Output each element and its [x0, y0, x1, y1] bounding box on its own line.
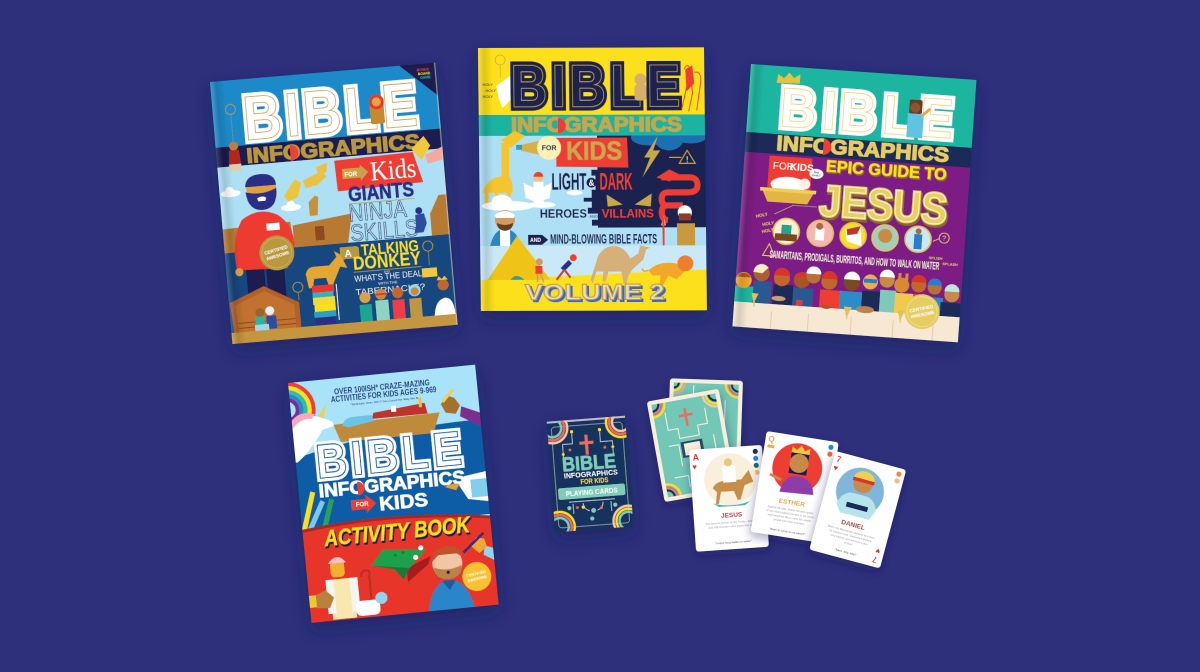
icon: origami frog — [370, 544, 433, 586]
icon: gold chariot — [284, 162, 328, 202]
holy holy holy text: HOLY — [761, 227, 774, 234]
man with beard — [234, 174, 294, 296]
question mark sign: ? — [942, 235, 946, 243]
description: Against all odds, Esther became queen — [767, 504, 815, 515]
quote: "I enjoy long walks on water." — [715, 539, 752, 545]
icon: warning triangle — [669, 150, 695, 164]
bottom rank — [871, 546, 881, 564]
BIBLE title: BIBLE — [240, 71, 420, 154]
corner rainbows — [536, 406, 645, 543]
rainbow — [259, 382, 316, 439]
icon: Moses — [490, 210, 522, 246]
icon: crown — [777, 72, 800, 84]
name: ESTHER — [778, 498, 806, 509]
NINJA SKILLS heading — [349, 200, 418, 242]
icon: angel at top left: HOLY — [482, 82, 493, 87]
BIBLE title: BIBLE — [313, 421, 464, 489]
FOR KIDS box: FOR — [772, 161, 794, 173]
icon: pie in O — [357, 481, 365, 495]
speech bubble: Really? — [812, 173, 821, 178]
ark — [222, 194, 450, 254]
EPIC GUIDE TO heading: EPIC GUIDE TO — [826, 158, 948, 186]
red lower panel — [302, 508, 499, 623]
BIBLE title: BIBLE — [240, 71, 420, 154]
BIBLE title: BIBLE — [561, 451, 617, 477]
storm cloud — [631, 135, 705, 150]
VOLUME 2 heading: VOLUME 2 — [527, 281, 667, 307]
MIND-BLOWING text — [528, 230, 657, 247]
ACTIVITY BOOK heading: ACTIVITY BOOK — [323, 514, 474, 553]
JESUS heading: JESUS — [818, 176, 949, 234]
certified awesome seal: AWESOME — [910, 310, 935, 319]
TABERNACLE question — [354, 266, 426, 297]
icon: gold angel top right — [412, 136, 430, 160]
row of characters — [358, 275, 456, 325]
TABERNACLE question: TABERNACLE? — [355, 281, 426, 297]
teal band — [479, 114, 705, 136]
icon: side symbols — [827, 444, 834, 457]
MIND-BLOWING text: AND — [530, 238, 541, 244]
BIBLE title: BIBLE — [778, 77, 955, 151]
last supper characters — [734, 259, 963, 317]
portrait — [768, 439, 826, 498]
JESUS heading: JESUS — [819, 178, 950, 236]
TALKING DONKEY text: A — [344, 249, 352, 260]
description: of lions — [844, 540, 853, 547]
icon: angel at top left — [482, 55, 511, 108]
icon: lion — [642, 255, 694, 286]
icon: side symbols — [894, 471, 902, 484]
icon: angel — [523, 172, 552, 204]
table — [732, 292, 960, 342]
ACTIVITY BOOK heading: ACTIVITY BOOK — [322, 512, 473, 551]
bottom rank: ♥ — [874, 546, 881, 556]
book: Volume 2 (yellow cover) — [478, 47, 709, 311]
KIDS text: KIDS — [378, 490, 429, 516]
clouds — [220, 186, 301, 212]
quote: "Here, kitty, kitty!" — [835, 547, 857, 557]
icon: warning triangle: ! — [686, 155, 688, 164]
FOR arrow: FOR — [356, 502, 370, 509]
certified awesome seal: CERTIFIED — [909, 304, 934, 314]
description — [705, 518, 760, 530]
hand with pencil — [308, 590, 335, 610]
splish splash text: SPLASH — [942, 262, 958, 267]
book: Activity Book — [259, 365, 499, 626]
ark — [331, 395, 442, 443]
icon: Jesus figure — [906, 99, 931, 139]
red box and KIDS: KIDS — [566, 136, 622, 166]
dark half — [583, 135, 706, 228]
FOR KIDS text: FOR KIDS — [580, 477, 609, 486]
vine decoration — [562, 431, 618, 514]
icon: runners — [535, 254, 577, 282]
certified awesome seal: CERTIFIED — [466, 570, 487, 578]
rank: Q — [768, 434, 775, 444]
icon: sheep — [355, 591, 389, 616]
icon: cross — [579, 434, 594, 455]
description: and risked her life to save the Jewish — [767, 512, 812, 523]
rank: A — [692, 452, 700, 463]
icon: lightning — [642, 135, 660, 178]
warning triangle — [763, 243, 775, 256]
holy holy holy text: HOLY — [755, 212, 768, 219]
card: Esther — [751, 431, 839, 543]
icon: turtle — [511, 276, 525, 280]
icon: pie in O — [558, 118, 566, 134]
icon: lamb in manger — [759, 175, 817, 205]
name: JESUS — [721, 511, 743, 520]
icon: side symbols — [752, 449, 759, 475]
NINJA SKILLS heading: SKILLS — [349, 215, 419, 248]
card: Jesus — [689, 445, 769, 552]
portrait — [830, 462, 889, 522]
clouds — [482, 190, 583, 211]
certified awesome seal — [461, 561, 493, 592]
HEROES and VILLAINS text: AND — [590, 214, 598, 219]
description: people from their enemies — [773, 517, 805, 526]
icon: snake — [661, 177, 698, 220]
INFOGRAPHICS heading: INFOGRAPHICS — [776, 132, 950, 167]
HEROES and VILLAINS text — [540, 206, 654, 221]
icon: pyramid — [487, 236, 551, 280]
icon: angel at top left: HOLY — [483, 94, 493, 99]
icon: glowing eyes — [607, 193, 652, 207]
rank: 7 — [835, 455, 843, 465]
ground — [232, 314, 458, 344]
TABERNACLE question: WITH THE — [378, 279, 398, 286]
TABERNACLE question: AND — [384, 269, 391, 274]
unicorn — [290, 403, 338, 463]
icon: giraffe — [482, 131, 526, 203]
icon: warrior — [661, 205, 695, 245]
description — [824, 523, 876, 552]
book: Epic Guide to Jesus (teal and purple cover): SAMARITANS, PRODIGALS, BURRITOS, AND HOW TO WALK ON WATER — [769, 249, 940, 273]
BIBLE title: BIBLE — [510, 53, 681, 120]
FOR KIDS box: KIDS — [789, 162, 814, 175]
sea — [293, 419, 490, 532]
top tagline: ACTIVITIES FOR KIDS AGES 9-969 — [330, 384, 437, 404]
FOR circle and beam: FOR — [542, 145, 557, 152]
description — [765, 504, 815, 527]
TALKING DONKEY text: TALKING — [360, 238, 420, 260]
card back: rear — [659, 369, 752, 483]
book: Bible Infographics for Kids (blue cover): BOARD — [418, 71, 431, 76]
TALKING DONKEY text: DONKEY — [352, 248, 422, 274]
FOR Kids banner: FOR — [344, 172, 358, 179]
FOR circle and beam — [516, 136, 561, 160]
PLAYING CARDS band: PLAYING CARDS — [566, 487, 618, 498]
VOLUME 2 heading: VOLUME 2 — [525, 279, 665, 305]
splish splash text: SPLISH — [929, 256, 943, 261]
icon: lion — [368, 94, 386, 124]
description: and fully human—who saved the world — [708, 522, 757, 530]
medallion row — [772, 216, 932, 255]
holy holy holy text — [754, 203, 817, 238]
icon: warning circle — [292, 282, 304, 301]
TALKING DONKEY text — [340, 240, 420, 270]
hand with pencil right — [462, 532, 494, 563]
FOR arrow — [350, 494, 377, 514]
book: Bible Infographics for Kids (blue cover) — [210, 63, 458, 344]
stable with nativity — [229, 283, 301, 334]
HEROES and VILLAINS text: VILLAINS — [602, 206, 654, 221]
top tagline: *Definitely Over 100 If You Count the Way We Do — [350, 396, 421, 407]
BIBLE title: BIBLE — [510, 53, 681, 120]
icon: ninja — [414, 207, 427, 234]
playing card box — [536, 406, 645, 543]
certified awesome seal — [258, 234, 296, 272]
card back: front — [636, 378, 747, 513]
rank: ♥ — [692, 462, 698, 472]
icon: red squid — [681, 65, 701, 111]
shepherd — [323, 554, 374, 620]
LIGHT and DARK text: & — [589, 179, 595, 188]
LIGHT and DARK text: LIGHT — [551, 169, 587, 196]
icon: pie in O — [823, 139, 832, 155]
book: Bible Infographics for Kids (blue cover): GAME — [420, 75, 431, 80]
FOR Kids banner: Kids — [369, 153, 417, 187]
icon: bear in letter L — [634, 73, 647, 101]
splish splash text — [928, 256, 958, 267]
book: Bible Infographics for Kids (blue cover): BONUS — [416, 67, 430, 72]
INFOGRAPHICS text: INFOGRAPHICS — [564, 469, 618, 481]
glue bottle — [444, 471, 488, 505]
certified awesome seal — [903, 293, 941, 330]
certified awesome seal: CERTIFIED — [264, 244, 289, 256]
FOR Kids banner — [334, 151, 424, 192]
BIBLE title: BIBLE — [313, 421, 464, 489]
icon: ark of covenant — [419, 240, 437, 278]
holy holy holy text: HOLY — [762, 220, 775, 227]
top tagline — [330, 377, 437, 408]
crayons — [301, 490, 334, 530]
rank — [691, 452, 701, 472]
INFOGRAPHICS heading: INFOGRAPHICS — [318, 467, 466, 501]
book: Epic Guide to Jesus (teal and purple cover) — [732, 64, 976, 342]
BIBLE title: BIBLE — [778, 77, 955, 151]
top tagline: OVER 100ISH* CRAZE-MAZING — [334, 377, 430, 397]
rank — [832, 454, 843, 473]
scene: product collection — [208, 47, 978, 632]
NINJA SKILLS heading: NINJA — [348, 196, 408, 228]
speech bubble — [809, 168, 824, 179]
TABERNACLE question: WHAT'S THE DEAL — [354, 269, 423, 284]
name: DANIEL — [840, 519, 866, 532]
hand and pencil — [439, 387, 481, 430]
GIANTS heading: GIANTS — [347, 178, 415, 207]
certified awesome seal: AWESOME — [467, 575, 488, 583]
icon: pie in O — [290, 144, 299, 161]
portrait — [702, 451, 758, 508]
INFOGRAPHICS heading: INFOGRAPHICS — [511, 113, 682, 137]
HEROES and VILLAINS text: HEROES — [540, 207, 587, 221]
INFOGRAPHICS heading: INFOGRAPHICS — [246, 130, 421, 168]
certified awesome seal: AWESOME — [266, 250, 290, 262]
MIND-BLOWING text: MIND-BLOWING BIBLE FACTS — [550, 230, 657, 247]
icon: camel — [590, 245, 651, 284]
description: The second person of the Trinity—fully God — [705, 518, 760, 526]
EPIC GUIDE TO heading: EPIC GUIDE TO — [825, 157, 947, 184]
FOR KIDS box — [767, 156, 815, 195]
speech bubble: Baa! — [814, 170, 820, 175]
icon: warning sign and soldier — [224, 104, 242, 172]
JESUS heading: JESUS — [818, 176, 949, 234]
description: Taken into Babylonian captivity as a teen, — [827, 523, 876, 540]
description: and visions, and survived a den — [831, 533, 868, 546]
icon: angel at top left: HOLY — [485, 88, 496, 93]
book: Volume 2 (yellow cover): DARK — [599, 169, 633, 196]
icon: golden donkey on book stack — [306, 251, 348, 325]
bearded man — [423, 544, 475, 611]
description: he followed God, interpreted dreams — [829, 528, 872, 543]
quote: "Want to come to my party?" — [769, 527, 806, 536]
bottom rank: 7 — [871, 554, 878, 564]
card: Daniel — [809, 451, 906, 568]
description: of the most powerful empire in the world — [766, 508, 814, 519]
rank: ♥ — [832, 463, 839, 473]
question mark sign — [933, 232, 950, 243]
